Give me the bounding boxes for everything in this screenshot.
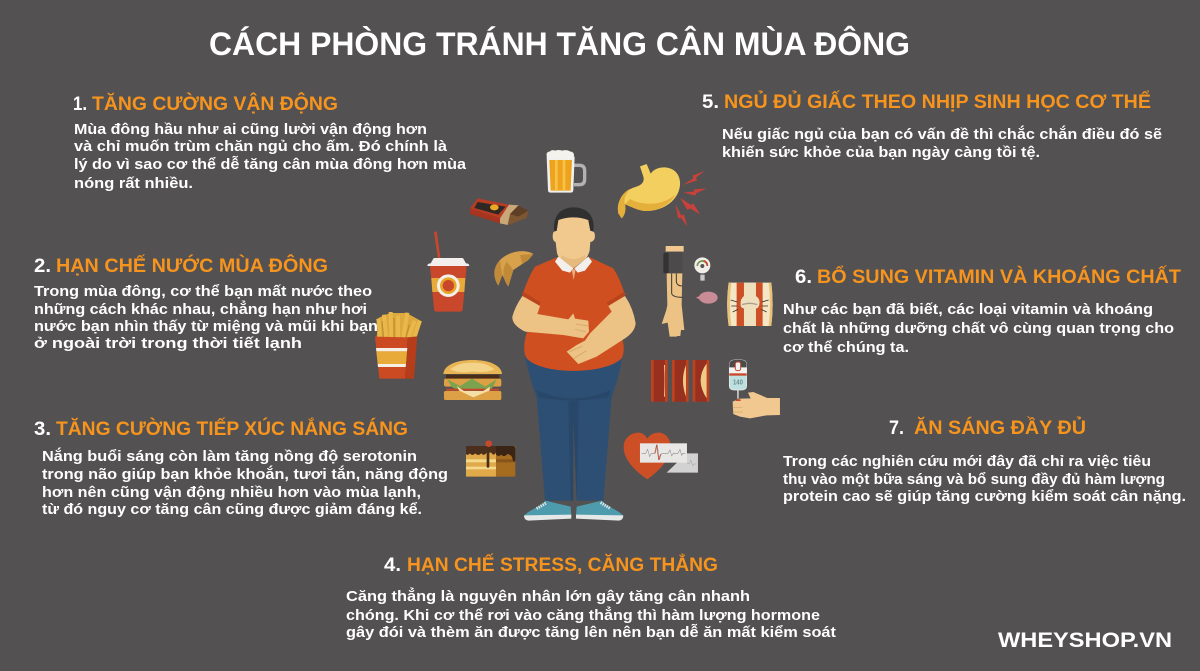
- heading 2: 2.: [34, 256, 51, 277]
- icon: glucose meter with hand: 140: [733, 380, 743, 387]
- heading 4: HẠN CHẾ STRESS, CĂNG THẲNG: [407, 554, 718, 576]
- body text 2: những cách khác nhau, chẳng hạn như hơi: [34, 300, 367, 318]
- body text 7: protein cao sẽ giúp tăng cường kiểm soát cân nặng.: [783, 488, 1186, 505]
- heading 6: BỔ SUNG VITAMIN VÀ KHOÁNG CHẤT: [817, 266, 1181, 288]
- body text 1: nóng rất nhiều.: [74, 175, 193, 192]
- panel: 3 tăng cường tiếp xúc nắng sáng: [34, 418, 448, 518]
- body text 7: [783, 453, 1186, 505]
- panel: 2 hạn chế nước mùa đông: [34, 255, 378, 352]
- body text 2: nước bạn nhìn thấy từ miệng và mũi khi bạn: [34, 318, 378, 335]
- icon: overweight man: [512, 207, 636, 521]
- body text 3: từ đó nguy cơ tăng cân cũng được giảm đáng kể.: [42, 501, 422, 518]
- panel: 7 ăn sáng đầy đủ: [783, 417, 1186, 505]
- icon: chocolate bar: [470, 198, 528, 225]
- icon: arm with blood pressure cuff: [662, 246, 684, 337]
- body text 1: Mùa đông hầu như ai cũng lười vận động hơn: [74, 121, 427, 138]
- body text 7: thụ vào một bữa sáng và bổ sung đầy đủ hàm lượng: [783, 471, 1165, 488]
- jeans: [525, 357, 622, 501]
- heading 6: 6.: [795, 267, 812, 288]
- body text 2: [34, 283, 378, 352]
- neck and head: [553, 217, 595, 268]
- heading 5: NGỦ ĐỦ GIẤC THEO NHỊP SINH HỌC CƠ THỂ: [724, 91, 1151, 113]
- icon: heart with ecg: [624, 433, 698, 479]
- body text 3: Nắng buổi sáng còn làm tăng nồng độ serotonin: [42, 447, 417, 465]
- shirt: [522, 257, 625, 371]
- icon: pain bolts: [676, 171, 707, 227]
- icon: stomach: [618, 164, 707, 227]
- body text 6: chất là những dưỡng chất vô cùng quan trọng cho: [783, 320, 1174, 337]
- body text 6: [783, 301, 1174, 356]
- right arm and hand: [567, 296, 636, 364]
- icon: arteries: [651, 360, 709, 402]
- icon: pink organ: [696, 292, 718, 304]
- heading 3: 3.: [34, 419, 51, 440]
- icon: pressure gauge: [694, 257, 710, 281]
- body text 6: Như các bạn đã biết, các loại vitamin và khoáng: [783, 301, 1153, 318]
- panel: 4 hạn chế stress: [346, 554, 836, 641]
- body text 5: Nếu giấc ngủ của bạn có vấn đề thì chắc chắn điều đó sẽ: [722, 125, 1162, 143]
- heading 5: 5.: [702, 92, 719, 113]
- icon: cake: [466, 440, 515, 477]
- heading 1: TĂNG CƯỜNG VẬN ĐỘNG: [92, 93, 338, 115]
- body text 6: cơ thể chúng ta.: [783, 339, 909, 356]
- heading 2: HẠN CHẾ NƯỚC MÙA ĐÔNG: [56, 255, 328, 277]
- icon: beer mug: [546, 150, 585, 193]
- heading 7: ĂN SÁNG ĐẦY ĐỦ: [914, 417, 1086, 439]
- body text 2: Trong mùa đông, cơ thể bạn mất nước theo: [34, 283, 372, 300]
- title: CÁCH PHÒNG TRÁNH TĂNG CÂN MÙA ĐÔNG: [209, 26, 910, 62]
- body text 3: hơn nên cũng vận động nhiều hơn vào mùa lạnh,: [42, 484, 421, 501]
- icon: glucose meter with hand: [729, 360, 780, 418]
- body text 3: [42, 447, 448, 518]
- heading 1: 1.: [73, 94, 87, 115]
- icon: french fries: [375, 312, 422, 379]
- heading 3: TĂNG CƯỜNG TIẾP XÚC NẮNG SÁNG: [56, 418, 408, 440]
- body text 2: ở ngoài trời trong thời tiết lạnh: [34, 335, 302, 352]
- panel: 1 tăng cường vận động: [73, 93, 467, 192]
- icon: croissant: [494, 251, 533, 287]
- shoes: [524, 501, 623, 521]
- brand logo text: WHEYSHOP.VN: [998, 629, 1172, 652]
- body text 1: [74, 121, 467, 192]
- body text 4: Căng thẳng là nguyên nhân lớn gây tăng cân nhanh: [346, 587, 750, 605]
- body text 3: trong não giúp bạn khỏe khoắn, tươi tắn, năng động: [42, 465, 448, 483]
- icon: knee joint: [727, 283, 773, 326]
- body text 7: Trong các nghiên cứu mới đây đã chỉ ra việc tiêu: [783, 453, 1151, 470]
- panel: 5 ngủ đủ giấc: [702, 91, 1162, 161]
- body text 5: khiến sức khỏe của bạn ngày càng tồi tệ.: [722, 144, 1040, 161]
- heading 4: 4.: [384, 555, 401, 576]
- heading 7: 7.: [889, 418, 904, 439]
- body text 4: [346, 587, 836, 641]
- icon: soda cup: [427, 231, 469, 312]
- left arm and hand: [512, 296, 589, 338]
- icon: burger: [443, 360, 502, 400]
- torso: [512, 207, 636, 371]
- collar: [555, 257, 592, 273]
- body text 4: chóng. Khi cơ thể rơi vào căng thẳng thì hàm lượng hormone: [346, 606, 820, 624]
- body text 4: gây đói và thèm ăn được tăng lên nên bạn dễ ăn mất kiểm soát: [346, 624, 836, 641]
- body text 1: lý do vì sao cơ thể dễ tăng cân mùa đông hơn mùa: [74, 156, 467, 173]
- hair: [554, 207, 594, 232]
- panel: 6 bổ sung vitamin: [783, 266, 1181, 356]
- body text 5: [722, 125, 1162, 161]
- body text 1: và chỉ muốn trùm chăn ngủ cho ấm. Đó chính là: [74, 138, 448, 155]
